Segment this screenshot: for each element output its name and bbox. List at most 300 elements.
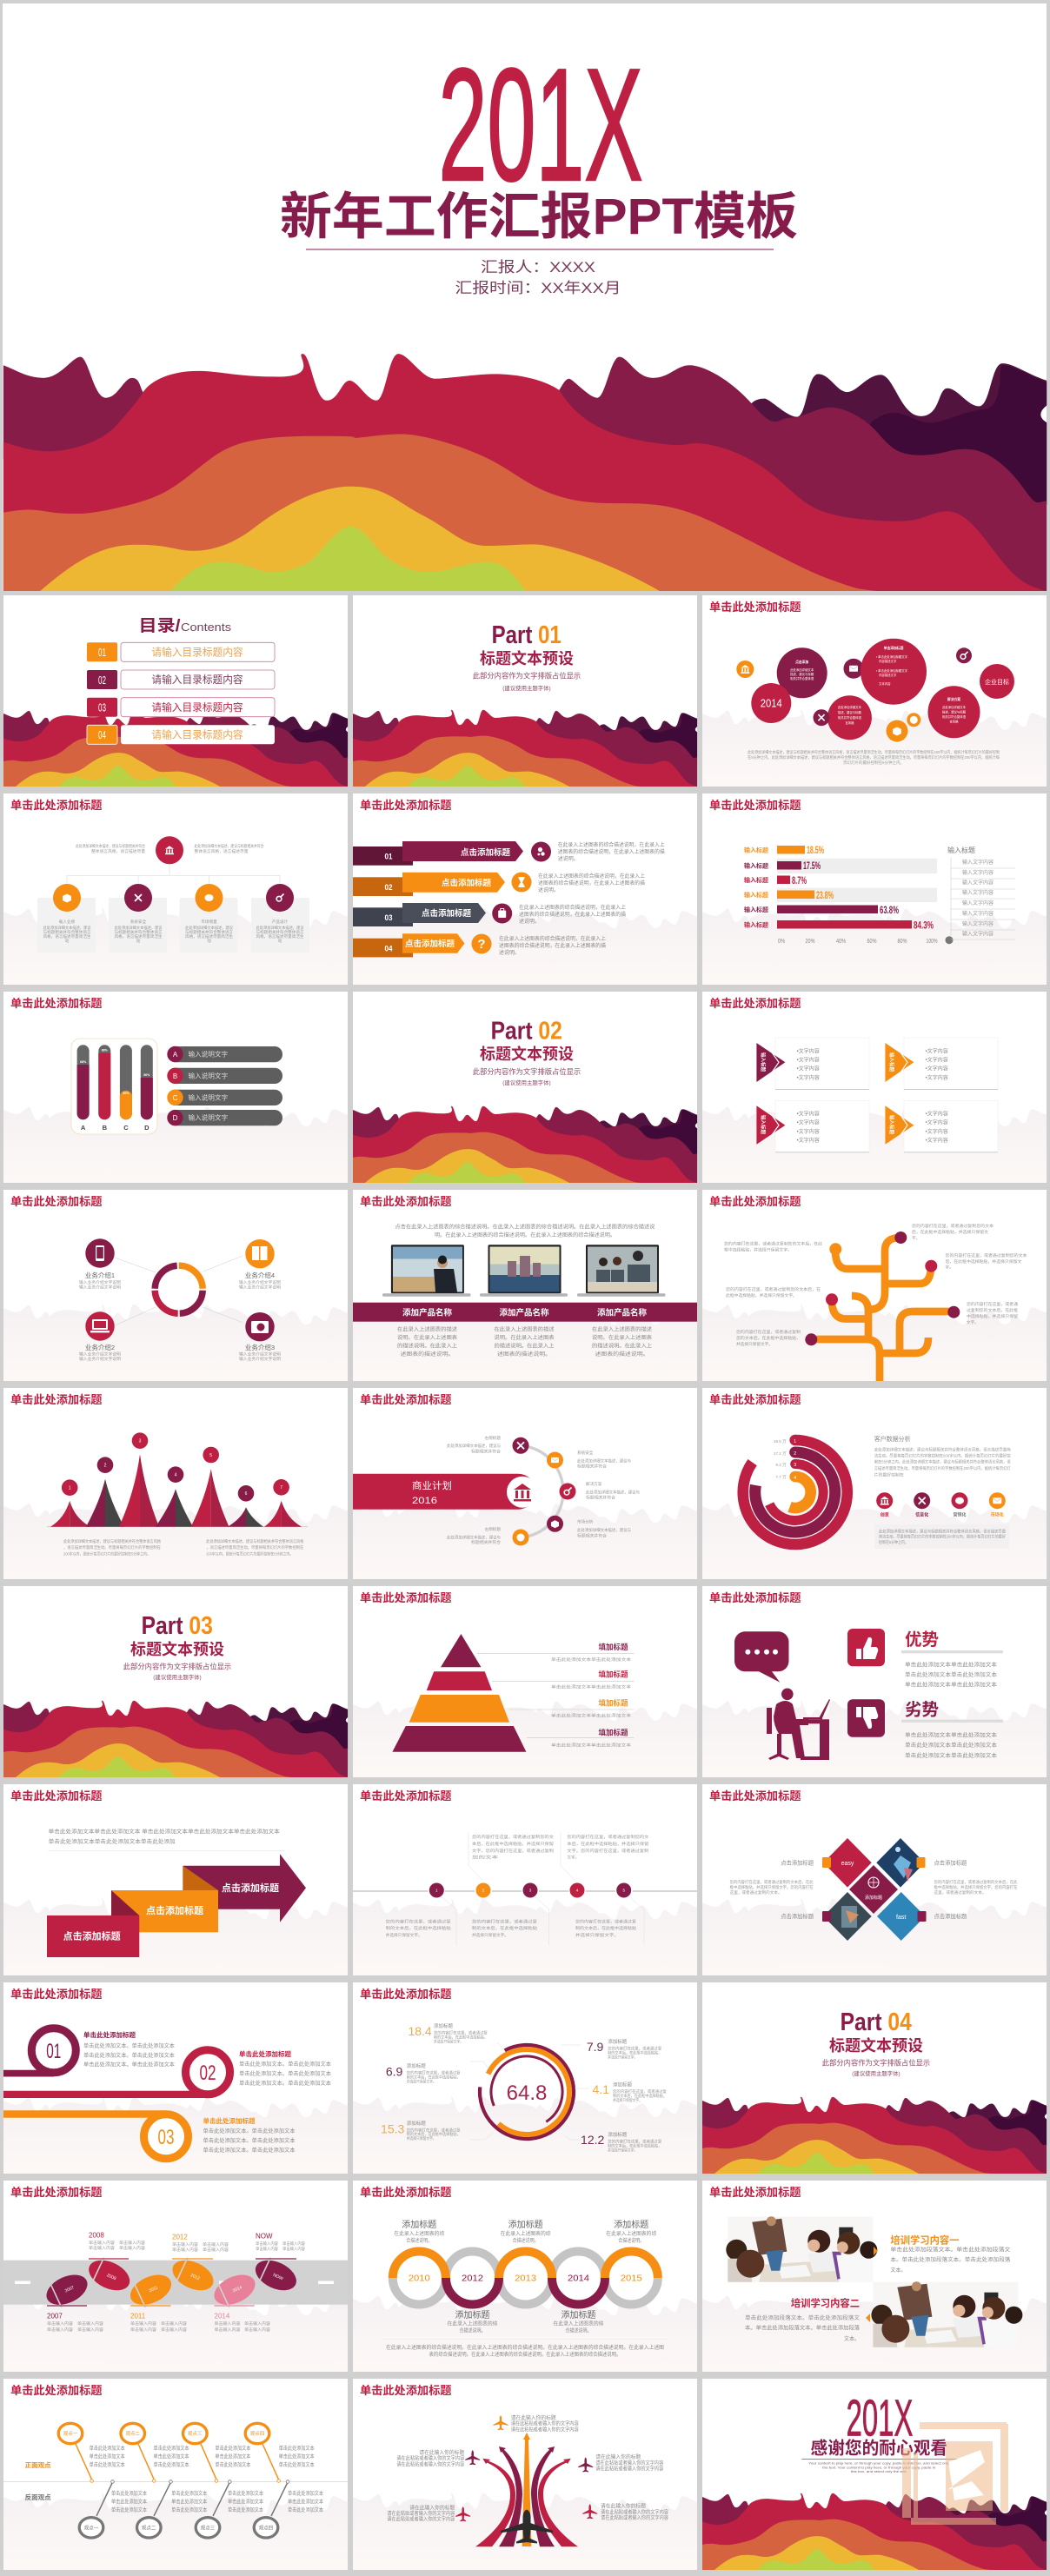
gauge leaders: [470, 2042, 589, 2140]
stat 15.3: 15.3: [381, 2121, 405, 2135]
training block 2: [745, 2297, 860, 2342]
pyramid descriptions: 单击此处添加文本单击此处添加文本: [551, 1712, 631, 1719]
bar chart: [744, 844, 937, 945]
laptop 1: [382, 1245, 471, 1297]
pin texts: 单击此处添加文本: [111, 2506, 147, 2513]
arc captions: 此处添加详细文本描述，建议与: [447, 1535, 501, 1540]
peak markers: 2: [104, 1464, 107, 1469]
training block 1: 单击此处添加段落文本。单击此处添加段落文: [890, 2246, 1010, 2253]
positive pin labels: 观点二: [125, 2431, 140, 2437]
stat 12.2: 12.2: [581, 2133, 605, 2147]
legend list: [946, 846, 1015, 944]
bubble cluster: • 单击此处添加标题文字: [876, 668, 908, 673]
diamond captions: 您的内容打在这里，或者通过复制的文本后，在此: [934, 1879, 1018, 1885]
legend list: 输入文字内容: [962, 880, 994, 886]
report date line: 汇报时间：XX年XX月: [455, 280, 621, 296]
weaknesses heading: 劣势: [905, 1700, 939, 1719]
customer analysis text: 洁生动。尽量将每页幻灯片的字数控制在200字以内，据统计每页幻灯片的最好控: [874, 1453, 1011, 1458]
contents row 4: 请输入目录标题内容: [151, 728, 243, 740]
negative pin labels: [84, 2526, 273, 2531]
pyramid: [392, 1634, 526, 1752]
panel: bubble diagram slide: [702, 595, 1047, 787]
pyramid descriptions: 单击此处添加文本单击此处添加文本: [551, 1684, 631, 1690]
timeline nodes: 1: [435, 1889, 438, 1893]
ring 02: [3, 2050, 229, 2098]
ring years: [409, 2274, 642, 2284]
service 2: [79, 1311, 121, 1362]
diamond cluster: [822, 1838, 927, 1941]
ribbon 04: 点击添加标题: [405, 939, 455, 949]
plane captions: 请在此输入你的标题: [409, 2504, 455, 2511]
pin texts: 单击此处添加文本: [288, 2490, 323, 2497]
caption text: 页幻灯片的最好控制在5分钟之内。: [843, 760, 904, 766]
peak markers: 7: [280, 1485, 282, 1490]
tree connectors: [67, 863, 280, 885]
bar chart: 23.8%: [816, 889, 834, 901]
illustration: layered colour waves: [3, 354, 1047, 591]
card 3: 市场增量: [201, 919, 217, 925]
slide title: 单击此处添加标题: [10, 798, 103, 812]
milestone notes: 单击输入内容: [119, 2240, 145, 2246]
diamond cluster: fast: [896, 1915, 906, 1921]
training block 1: 本。单击此处添加段落文本。单击此处添加段落: [890, 2256, 1010, 2263]
stat 12.2: 并选择只保留文字。: [608, 2147, 637, 2154]
milestone labels: 2008: [89, 2232, 104, 2240]
arc captions: 此处添加详细文本描述，建议与: [577, 1527, 631, 1533]
axis: [3, 2480, 348, 2483]
negative pin labels: 观点二: [142, 2526, 156, 2531]
bar chart: 60%: [867, 939, 876, 945]
product descriptions: 的描述说明。在此录入上: [494, 1342, 555, 1349]
card 2: [109, 884, 167, 953]
arc captions: 此处添加详细文本描述，建议与: [586, 1490, 640, 1495]
footprints: 2007: [64, 2285, 76, 2294]
ring 01: 01: [46, 2040, 61, 2063]
stat 18.4: 并选择只保留文字。: [434, 2039, 463, 2044]
service 4: 输入业务介绍文字说明: [239, 1279, 281, 1285]
stat 18.4: 制的文本后，在此框中选择粘贴，: [434, 2034, 488, 2041]
stat 15.3: 添加标题: [407, 2120, 426, 2127]
icon row: [876, 1492, 1006, 1517]
stat 18.4: [408, 2022, 488, 2044]
icon row: 市场化: [991, 1512, 1004, 1517]
footnote text: 在此录入上述图表的综合描述说明。在此录入上述图表的综合描述说明。在此录入上述图表的综合描述说明。在此录入上述图: [386, 2344, 664, 2351]
strengths heading: 优势: [905, 1630, 939, 1650]
caption text: 在5分钟之内。此处添加详细文本描述，建议与标题相关并符合整体语言风格，语言描述尽量简洁生动。尽量将每页幻灯片的字数控制在200字以内，据统计每: [748, 754, 1000, 760]
stat 7.9: [587, 2038, 662, 2060]
part 04 note: 此部分内容作为文字排版占位显示: [822, 2058, 930, 2067]
business plan band: [353, 1474, 538, 1510]
contents row 3: [87, 698, 275, 717]
milestone notes: 单击输入内容: [119, 2245, 145, 2251]
training block 2: 单击此处添加段落文本。单击此处添加段落文: [745, 2314, 860, 2321]
panel: stepped arrow slide: [3, 1784, 348, 1975]
ring 03 text: [203, 2116, 296, 2154]
caption text: [748, 749, 1000, 766]
upper ring labels: 在此录入上述图表的综: [501, 2230, 551, 2237]
legend list: 输入文字内容: [962, 910, 994, 917]
ribbon 03: 点击添加标题: [422, 908, 472, 919]
plane captions: 请在此输入你的标题: [419, 2449, 464, 2456]
product descriptions: [397, 1326, 652, 1358]
plane captions: 请在此粘贴或者输入你的文字内容: [595, 2465, 663, 2472]
diamond labels: 点击添加标题: [781, 1912, 814, 1920]
positive pin labels: 观点三: [188, 2431, 203, 2437]
top node: 整体语言风格，语言描述尽量: [91, 848, 145, 854]
stat 18.4: 您的内容打在这里，或者通过复: [434, 2030, 488, 2035]
ring 02 text: 单击此处添加文本。单击此处添加文本: [239, 2061, 331, 2068]
slide title: 单击此处添加标题: [10, 1392, 103, 1406]
top node: [76, 836, 264, 864]
service 1: 业务介绍1: [85, 1271, 115, 1279]
bar chart: 20%: [805, 939, 815, 945]
row headings: 反面观点: [25, 2493, 51, 2501]
part 03 heading: Part 03: [142, 1611, 213, 1639]
intro text: 点击在此录入上述图表的综合描述说明。在此录入上述图表的综合描述说明。在此录入上述图表的综合描述说: [395, 1224, 655, 1231]
ribbon 03: 述说明。: [519, 918, 540, 925]
person at desk: [767, 1688, 830, 1760]
upper captions: 本后，在此框中选择粘贴，并选择只保留: [567, 1841, 649, 1847]
contents row 1: 01: [98, 646, 106, 659]
diamond labels: 点击添加标题: [934, 1858, 967, 1867]
note box: 控制在5分钟之内。: [879, 1539, 908, 1545]
slide title: 单击此处添加标题: [360, 1987, 452, 2001]
tree captions: 后，在此框中选择粘贴，并选择只保留文: [946, 1258, 1022, 1265]
diamond labels: 点击添加标题: [934, 1912, 967, 1920]
product descriptions: 的描述说明。在此录入上: [592, 1342, 652, 1349]
closing title: 感谢您的耐心观看: [811, 2439, 947, 2458]
closing rule: [801, 2458, 956, 2460]
stat 4.1: 4.1: [593, 2082, 609, 2096]
ring 03 text: 单击此处添加文本。单击此处添加文本: [203, 2137, 296, 2144]
plane captions: 请在此粘贴或者输入你的文字内容: [601, 2509, 668, 2516]
stat 4.1: 添加标题: [613, 2081, 633, 2088]
ring 03 text: 单击此处添加标题: [203, 2116, 256, 2125]
pyramid labels: [598, 1643, 628, 1736]
plane captions: 请在此粘贴或者输入你的文字内容: [396, 2460, 464, 2467]
milestone labels: 2011: [130, 2312, 146, 2320]
part 03 subtitle: 标题文本预设: [130, 1640, 224, 1658]
tree captions: 过复制您的文本后，在此框: [967, 1307, 1018, 1313]
ribbon 01: 01: [384, 852, 393, 860]
peak captions: ，语言描述尽量简洁生动。尽量将每页幻灯片的字数控制在: [63, 1544, 161, 1550]
pyramid descriptions: 单击此处添加文本单击此处添加文本: [551, 1656, 631, 1663]
stat 7.9: 并选择只保留文字。: [608, 2055, 637, 2060]
positive pin labels: 观点一: [63, 2431, 78, 2437]
stamp watermark: [902, 2422, 1008, 2525]
legend pill D: [167, 1110, 282, 1125]
part 02 heading: Part 02: [491, 1017, 562, 1045]
ring 01 text: 单击此处添加文本。单击此处添加文本: [83, 2052, 175, 2059]
positive pins: [58, 2423, 280, 2482]
tree captions: 后，在此框中选择粘贴，并选择只保留文: [912, 1229, 988, 1235]
milestone notes: 单击输入内容: [130, 2320, 156, 2327]
step arrow graphic: 点击添加标题: [63, 1929, 121, 1942]
panel: capsule bars slide: [3, 992, 348, 1183]
arc captions: 标题相关并符合: [577, 1533, 607, 1538]
note box: 简洁生动。尽量将每页幻灯片的字数控制在200字以内，据统计每页幻灯片的最好: [879, 1533, 1006, 1540]
footprints: 2014: [232, 2285, 243, 2294]
stat 7.9: 7.9: [587, 2040, 604, 2054]
business plan band: 商业计划: [412, 1479, 452, 1491]
pin texts: 单击此处添加文本: [228, 2506, 263, 2513]
card 3: •文字内容: [797, 1128, 820, 1135]
milestone notes: 单击输入内容: [161, 2320, 187, 2327]
capsule chart: A: [81, 1124, 86, 1132]
bubble cluster: 描述，建议与标题: [838, 710, 862, 714]
bubble cluster: 点击添加: [795, 660, 808, 664]
row headings: 正面观点: [25, 2460, 51, 2469]
pyramid leader lines: [476, 1653, 634, 1737]
milestone notes: 单击输入内容: [203, 2241, 229, 2247]
tree captions: 您的内容打在这里，或者通过复制: [736, 1329, 801, 1335]
top node: 此处添加详细文本描述，建议与标题相关并符合: [76, 843, 145, 849]
milestone notes: 单击输入内容: [244, 2320, 270, 2327]
leader lines: [442, 1832, 644, 1945]
stat 18.4: 18.4: [408, 2024, 432, 2038]
arc captions: 市场分析: [577, 1519, 594, 1524]
positive pin labels: 观点四: [250, 2431, 264, 2437]
milestone notes: 单击输入内容: [47, 2320, 73, 2327]
service 2: 业务介绍2: [85, 1343, 115, 1351]
milestone notes: 单击输入内容: [47, 2327, 73, 2333]
card 1: [756, 1038, 869, 1090]
pyramid descriptions: [551, 1656, 631, 1749]
bar chart: 0%: [778, 939, 785, 945]
laptop 2: [480, 1245, 568, 1297]
timeline nodes: 5: [622, 1889, 625, 1893]
slide title: 单击此处添加标题: [10, 1789, 103, 1803]
pin texts: 单击此处添加文本: [215, 2445, 250, 2452]
speech bubble: [734, 1631, 789, 1683]
slide title: 单击此处添加标题: [709, 996, 801, 1010]
card 3: •文字内容: [797, 1137, 820, 1144]
arc captions: 标题相关并符合: [577, 1464, 607, 1469]
upper ring labels: 合描述说明。: [406, 2237, 432, 2244]
capsule chart: 30%: [123, 1092, 130, 1095]
slide title: 单击此处添加标题: [10, 996, 103, 1010]
footnote text: 表的综合描述说明。在此录入上述图表的综合描述说明。在此录入上述图表的综合描述说明。: [429, 2351, 621, 2358]
part 01 hint: (建议使用主题字体): [502, 684, 551, 692]
cover title: 新年工作汇报PPT模板: [280, 189, 798, 245]
bubble cluster: 内容描述文字: [879, 659, 897, 663]
ribbon 03: 在此录入上述图表的综合描述说明，在此录入上: [519, 904, 626, 911]
cover year 201X: 201X: [438, 35, 643, 214]
contents row 4: [87, 725, 275, 744]
pyramid labels: 填加标题: [598, 1670, 628, 1679]
customer analysis text: 言描述尽量简洁生动。尽量将每页幻灯片的字数控制在200字以内，据统计每页幻灯: [874, 1465, 1011, 1471]
capsule chart: 88%: [102, 1048, 109, 1052]
tree captions: 文字。: [967, 1319, 979, 1325]
lower ring labels: [447, 2309, 603, 2334]
product descriptions: 的描述说明。在此录入上: [397, 1342, 457, 1349]
ribbon 03: 03: [384, 913, 393, 922]
card 3: 与标题相关并符合整体语言: [185, 929, 233, 935]
arc captions: 标题相关并符合: [471, 1448, 501, 1455]
arc captions: [447, 1435, 640, 1545]
stat 6.9: 您的内容打在这里，或者通过复: [407, 2070, 461, 2075]
pin texts: 单击此处添加文本: [111, 2498, 147, 2505]
weaknesses text: 单击此处添加文本单击此处添加文本: [905, 1731, 997, 1738]
footprints: 2008: [106, 2273, 117, 2281]
small plane lower right: [582, 2504, 597, 2519]
thumbs up tile: [847, 1629, 885, 1666]
lower captions: [386, 1919, 636, 1938]
ring years: 2015: [621, 2274, 642, 2284]
bubble cluster: 此处添加详细文本: [790, 667, 814, 672]
peak captions: 200字以内，据统计每页幻灯片的最好控制在5分钟之内。: [206, 1550, 293, 1557]
milestone notes: 单击输入内容: [130, 2327, 156, 2333]
legend pill B: 输入说明文字: [188, 1071, 228, 1079]
closing small text: Your content to play here, or through your copy, paste in this box, and select only: [808, 2461, 949, 2465]
card 2: 动: [136, 938, 141, 944]
product descriptions: 说明。在此录入上述图表: [494, 1334, 555, 1341]
plane captions: 请在此输入你的标题: [511, 2414, 556, 2421]
ribbon 02: 述图表的综合描述说明，在此录入上述图表的描: [538, 880, 645, 886]
part 02 hint: (建议使用主题字体): [502, 1079, 551, 1086]
slide title: 单击此处添加标题: [10, 2185, 103, 2199]
pin texts: 单击此处添加文本: [228, 2490, 263, 2497]
milestone notes: 单击输入内容: [77, 2327, 103, 2333]
panel: four arrow cards slide: [702, 992, 1047, 1183]
stat 6.9: 并选择只保留文字。: [407, 2079, 436, 2084]
plane captions: 请在此粘贴或者输入你的文字内容: [511, 2426, 579, 2433]
ring years: 2010: [409, 2274, 430, 2284]
ring 01 text: 单击此处添加文本。单击此处添加文本: [83, 2042, 175, 2049]
legend pill D: 输入说明文字: [188, 1113, 228, 1122]
bubble cluster: 相关并符合整体语: [838, 715, 862, 720]
diamond captions: 您的内容打在这里，或者通过复制的文本后，在此: [730, 1879, 814, 1885]
card 3: 风格，语言描述尽量简洁生: [185, 933, 233, 939]
milestone notes: 单击输入内容: [256, 2241, 278, 2247]
legend list: 输入文字内容: [962, 930, 994, 937]
card 4: [251, 884, 309, 953]
step arrow graphic: [47, 1854, 306, 1957]
bubble cluster: 企业目标: [985, 678, 1009, 686]
pin texts: 单击此处添加文本: [153, 2453, 189, 2460]
contents row 3: 请输入目录标题内容: [151, 701, 243, 714]
slide title: 单击此处添加标题: [10, 2383, 103, 2397]
milestone notes: 单击输入内容: [244, 2327, 270, 2333]
pin texts: 单击此处添加文本: [279, 2453, 315, 2460]
strengths text: 单击此处添加文本单击此处添加文本: [905, 1661, 997, 1668]
milestone notes: [47, 2240, 305, 2333]
bar chart: 输入标题: [744, 846, 768, 853]
card 4: •文字内容: [926, 1128, 948, 1135]
footprints: 2011: [148, 2285, 159, 2294]
pyramid descriptions: 单击此处添加文本单击此处添加文本: [551, 1742, 631, 1749]
card 3: [756, 1100, 869, 1152]
photo 1: [726, 2216, 877, 2282]
divider: [382, 2338, 668, 2340]
stat 6.9: 6.9: [386, 2064, 403, 2078]
tree captions: 您的内容打在这里，或者通过复制您的文本: [912, 1223, 994, 1229]
card 1: 此处添加详细文本描述，建议: [43, 925, 91, 931]
ring 03: [3, 2110, 188, 2159]
bar chart: 84.3%: [914, 920, 934, 932]
ribbon 04: 述图表的综合描述说明，在此录入上述图表的描: [499, 942, 606, 949]
ribbon 04: 在此录入上述图表的综合描述说明，在此录入上: [499, 935, 606, 942]
peak markers: 5: [209, 1453, 212, 1458]
upper ring labels: 合描述说明。: [513, 2237, 539, 2244]
card 1: •文字内容: [797, 1074, 820, 1081]
product band: 添加产品名称: [499, 1307, 549, 1318]
slide title: 单击此处添加标题: [360, 1590, 452, 1604]
upper captions: [472, 1834, 649, 1860]
card 4: 风格，语言描述尽量简洁生: [256, 933, 304, 939]
capsule chart: C: [123, 1124, 129, 1132]
stat 6.9: 制的文本后，在此框中选择粘贴，: [407, 2074, 461, 2081]
bubble cluster: 2014: [761, 697, 782, 709]
ring 02: 02: [200, 2061, 216, 2085]
training block 1: 培训学习内容一: [890, 2234, 959, 2246]
tree captions: 您的内容打在这里，或者通过复制您的文本后，在: [726, 1286, 821, 1292]
ring 02 text: [239, 2049, 331, 2087]
pin texts: 单击此处添加文本: [171, 2506, 207, 2513]
legend pill B: B: [173, 1072, 177, 1080]
part 01 subtitle: 标题文本预设: [480, 649, 574, 667]
stat 15.3: 并选择只保留文字。: [407, 2135, 436, 2141]
ribbon 04: 04: [384, 944, 393, 953]
card 3: •文字内容: [797, 1119, 820, 1126]
footprints: NOW: [272, 2273, 284, 2282]
part 01 heading: Part 01: [492, 621, 562, 649]
bar chart: 输入标题: [744, 862, 768, 869]
dotted rule: [49, 1849, 284, 1851]
ribbon 04: ?: [477, 937, 486, 952]
card 2: 风格，语言描述尽量简洁生: [115, 933, 163, 939]
radial chart labels: 7.7 万: [775, 1475, 787, 1480]
panel: ribbon list slide: [353, 793, 697, 985]
tree end dots: [805, 1232, 960, 1345]
card 4: 动: [278, 938, 282, 944]
diamond captions: [730, 1879, 1018, 1895]
radial chart labels: 17.2 万: [774, 1451, 787, 1457]
closing small text: [808, 2461, 949, 2473]
customer analysis text: 片的最好控制在: [874, 1472, 904, 1477]
weaknesses text: 单击此处添加文本单击此处添加文本: [905, 1752, 997, 1759]
note box: 此处添加详细文本描述，建议与标题相关并符合整体语言风格，语言描述尽量: [879, 1528, 1006, 1535]
card 2: [885, 1038, 998, 1090]
pyramid labels: 填加标题: [598, 1643, 628, 1651]
tree captions: 框中选择粘贴，并选择只保留文字。: [724, 1246, 792, 1253]
ribbon 03: [353, 903, 626, 926]
part 02 subtitle: 标题文本预设: [480, 1045, 574, 1063]
strengths text: 单击此处添加文本单击此处添加文本: [905, 1671, 997, 1678]
part 04 subtitle: 标题文本预设: [829, 2036, 923, 2055]
tree captions: [724, 1223, 1027, 1347]
service 4: 业务介绍4: [245, 1271, 275, 1279]
ribbon 01: 述图表的综合描述说明，在此录入上述图表的描: [558, 848, 665, 855]
legend list: 输入文字内容: [962, 859, 994, 866]
panel: branching tree slide: [702, 1190, 1047, 1381]
diamond captions: 这里，或者通过复制的文本。: [934, 1889, 986, 1895]
bar chart: 输入标题: [744, 921, 768, 928]
heading rules: [901, 1652, 1003, 1721]
panel: horizontal bar chart slide: [702, 793, 1047, 985]
contents row 2: 请输入目录标题内容: [151, 674, 243, 686]
milestone notes: 单击输入内容: [89, 2240, 115, 2246]
card 3: [179, 884, 238, 953]
panel: chain rings slide: [353, 2181, 697, 2372]
interlocked rings: [393, 2251, 658, 2305]
diamond captions: 这里，或者通过复制的文本。: [730, 1889, 782, 1895]
milestone notes: 单击输入内容: [203, 2247, 229, 2253]
bubble cluster: 解决方案: [947, 697, 960, 701]
intro text: 单击此处添加文本单击此处添加文本单击此处添加: [49, 1838, 176, 1845]
stat 18.4: 添加标题: [434, 2022, 454, 2029]
part 03 hint: (建议使用主题字体): [153, 1673, 202, 1681]
